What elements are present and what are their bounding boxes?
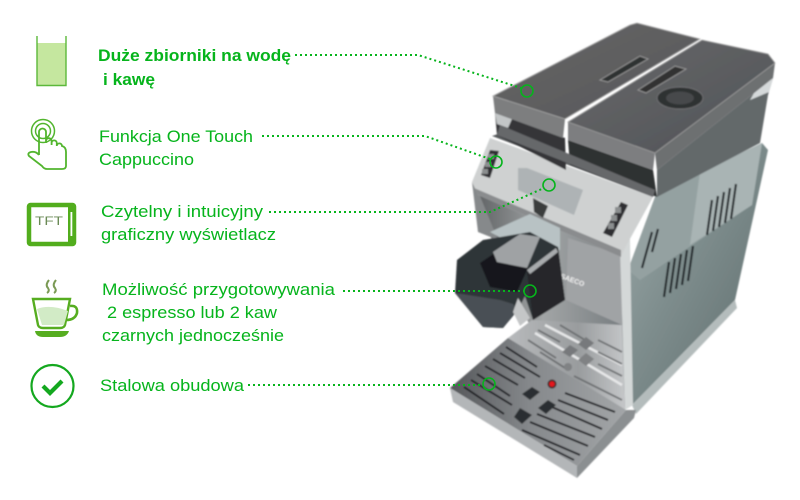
machine: front column	[472, 182, 633, 410]
leader line	[262, 136, 502, 168]
label text: czarnych jednocześnie	[102, 327, 284, 345]
icon: touching hand	[28, 120, 66, 169]
icon: TFT display: TFT	[35, 214, 64, 228]
machine: drip tray	[450, 320, 636, 478]
label text	[101, 203, 276, 244]
machine: right lid	[568, 40, 775, 170]
machine: control panel	[472, 131, 655, 257]
icon: coffee cup	[33, 280, 77, 337]
callout: two drinks at once	[102, 281, 536, 345]
coffee machine illustration	[450, 23, 775, 478]
machine: coffee spout	[455, 214, 565, 328]
icon: TFT display	[29, 205, 75, 244]
callout: graphic display	[101, 179, 555, 244]
label text: i kawę	[103, 71, 155, 89]
leader line	[343, 285, 536, 297]
machine: right side body	[628, 143, 768, 414]
machine: left lid	[493, 23, 700, 138]
label text: Funkcja One Touch	[99, 128, 253, 146]
machine: front column: SAECO	[559, 273, 586, 289]
callout: water and coffee tanks	[98, 47, 533, 97]
machine: water and coffee containers	[495, 78, 773, 197]
label text	[102, 281, 336, 345]
callout: steel housing	[100, 377, 495, 395]
icon: glass tank	[37, 36, 66, 86]
label text	[98, 47, 291, 89]
label text	[99, 128, 253, 169]
leader line	[295, 55, 533, 97]
label text: Duże zbiorniki na wodę	[98, 47, 291, 65]
label text: Stalowa obudowa	[100, 377, 245, 395]
leader line	[269, 179, 555, 212]
label text: Cappuccino	[99, 151, 194, 169]
icon: check mark in circle	[32, 365, 74, 407]
callout: one touch cappuccino	[99, 128, 502, 169]
label text: 2 espresso lub 2 kaw	[107, 304, 277, 322]
label text: graficzny wyświetlacz	[101, 226, 276, 244]
label text: Możliwość przygotowywania	[102, 281, 336, 299]
label text: Czytelny i intuicyjny	[101, 203, 264, 221]
leader line	[248, 378, 495, 390]
